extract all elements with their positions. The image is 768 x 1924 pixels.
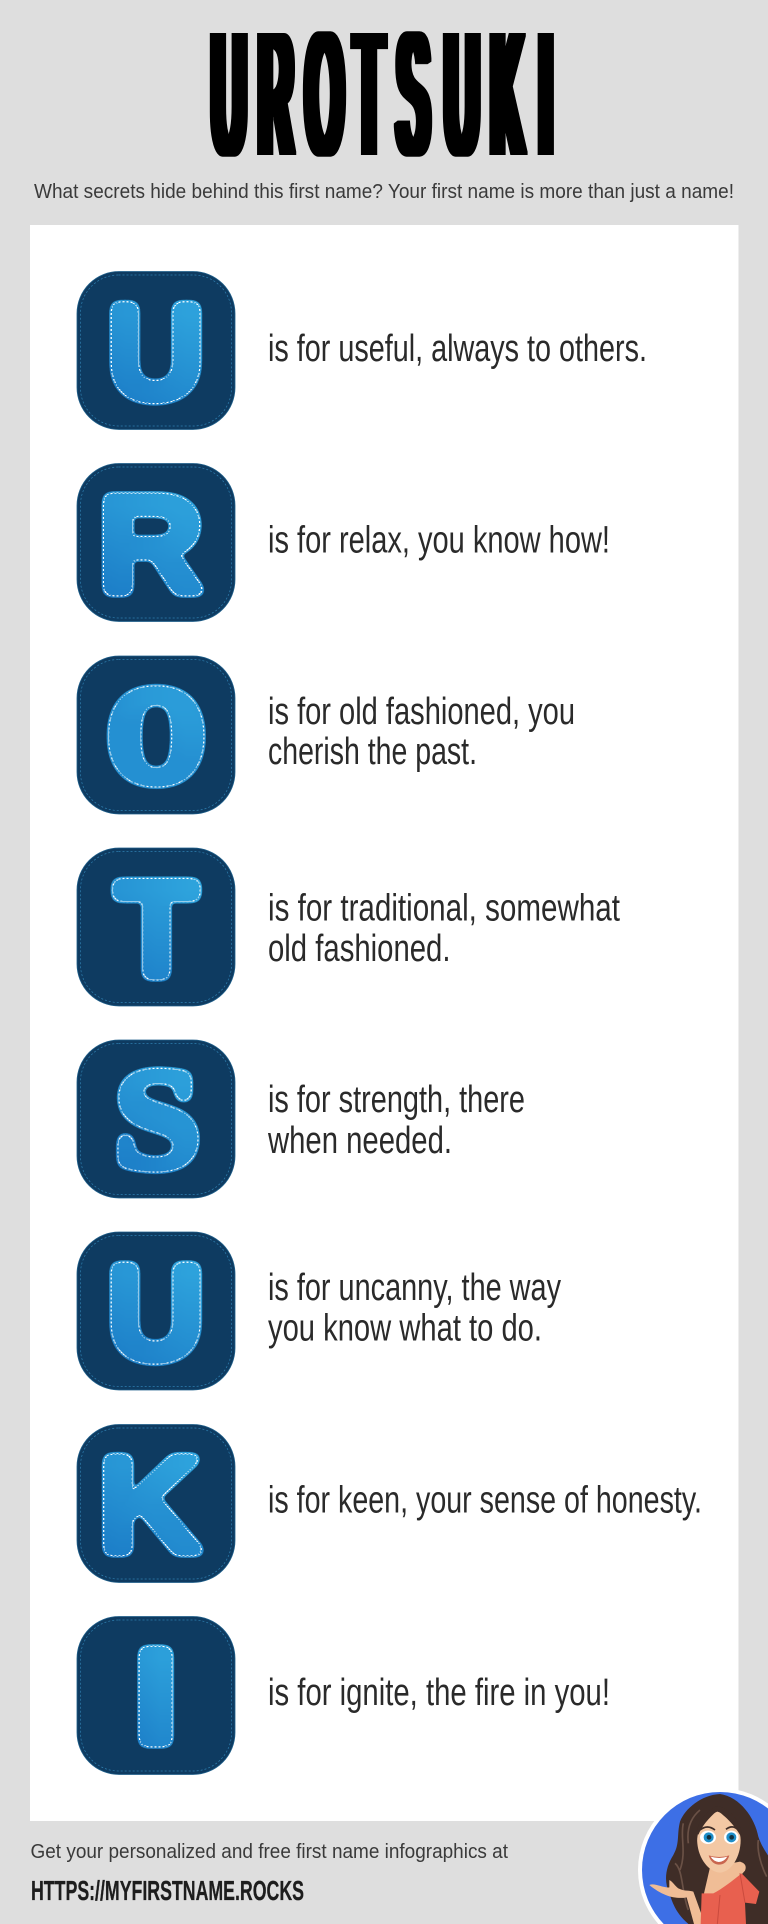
icon: letter O [77,656,235,814]
text: S lines: is for strength, there [268,1079,525,1121]
footer text: Get your personalized and free first name infographics at [30,1840,508,1863]
text: T lines [268,888,620,970]
text: O lines: cherish the past. [268,731,477,773]
text: U lines: you know what to do. [268,1308,542,1350]
footer url: HTTPS://MYFIRSTNAME.ROCKS [31,1875,304,1906]
icon: letter U: U [107,276,204,428]
panel: white letters panel [30,225,738,1821]
text: R line: is for relax, you know how! [268,520,610,562]
icon: letter T [77,848,235,1006]
row: letter R relax [77,464,610,622]
text: U lines [268,1267,561,1350]
text: S lines: when needed. [267,1120,452,1162]
row: letter T traditional [77,848,620,1006]
icon: letter I: I [131,1621,180,1772]
icon: letter U [77,1232,235,1390]
text: S lines [267,1079,525,1162]
text: U line: is for useful, always to others. [268,328,647,370]
row: letter S strength [77,1039,525,1198]
icon: letter I [77,1616,235,1774]
icon: avatar woman in circle [638,1788,768,1924]
icon: letter U: U [107,1237,204,1388]
text: O lines [268,691,575,773]
icon: letter R [77,464,235,622]
icon: letter S: S [114,1039,201,1198]
icon: letter T: T [115,853,198,1005]
icon: letter R: R [98,468,204,622]
icon: letter S [77,1039,235,1198]
row: letter K keen [77,1424,702,1582]
row: letter U uncanny [77,1232,561,1390]
icon: letter K: K [98,1428,202,1581]
row: letter I ignite [77,1616,610,1774]
subtitle: What secrets hide behind this first name? Your first name is more than just a name! [34,180,734,203]
icon: letter O: O [109,662,204,809]
title: UROTSUKI [212,0,552,190]
text: I line: is for ignite, the fire in you! [268,1672,610,1714]
row: letter O old fashioned [77,656,575,814]
row: letter U useful [77,272,647,430]
text: U lines: is for uncanny, the way [268,1267,561,1309]
icon: letter K [77,1424,235,1582]
icon: letter U [77,272,235,430]
text: O lines: is for old fashioned, you [268,691,575,733]
text: T lines: is for traditional, somewhat [268,888,620,930]
text: T lines: old fashioned. [268,928,450,970]
